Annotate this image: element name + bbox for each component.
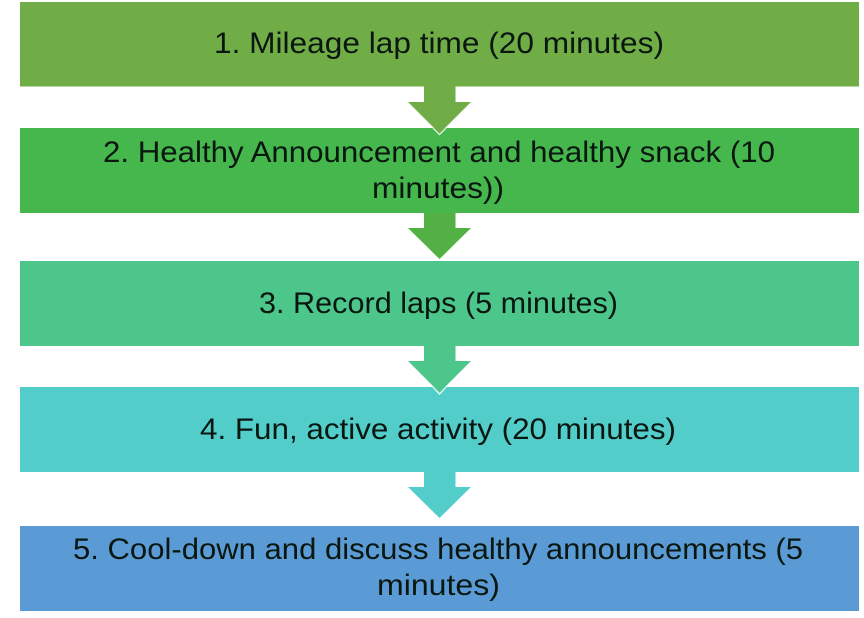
arrow: step 2 to step 3 (408, 213, 471, 259)
step 2 label: minutes)) (372, 172, 504, 205)
step 1 panel (20, 2, 859, 86)
step 2 panel (20, 128, 859, 213)
step 5 label: 5. Cool-down and discuss healthy announcements (5 (73, 533, 803, 566)
step 2 label: 2. Healthy Announcement and healthy snack (10 (103, 136, 775, 169)
arrow: step 4 to step 5 (408, 472, 471, 518)
step 5 label: minutes) (377, 569, 500, 602)
step 4 panel (20, 387, 859, 472)
arrow: step 3 to step 4 (408, 346, 471, 394)
step 3 label: 3. Record laps (5 minutes) (259, 287, 618, 320)
step 3 panel (20, 261, 859, 346)
step 4 label: 4. Fun, active activity (20 minutes) (200, 413, 676, 446)
step 5 panel (20, 526, 859, 611)
arrow: step 1 to step 2 (408, 86, 471, 134)
step 1 label: 1. Mileage lap time (20 minutes) (214, 27, 664, 60)
